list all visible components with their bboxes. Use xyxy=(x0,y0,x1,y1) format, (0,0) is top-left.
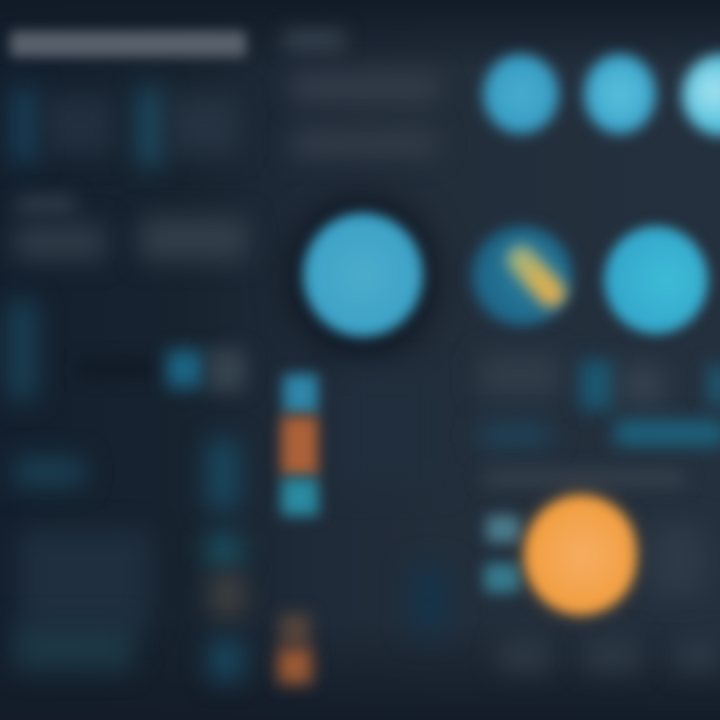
icon: top circle 3 xyxy=(682,54,720,136)
heading xyxy=(284,30,344,52)
chip bottom xyxy=(484,563,520,593)
small teal mark xyxy=(480,425,550,445)
grey text xyxy=(620,365,665,405)
left accent bar xyxy=(8,300,36,400)
segment blue xyxy=(283,374,319,414)
column blue mid xyxy=(208,535,240,565)
chart: stacked bar xyxy=(270,364,328,525)
icon: top circle 2 xyxy=(584,54,656,134)
panel: lower right card xyxy=(476,469,716,674)
heading left xyxy=(16,196,76,212)
stat text right xyxy=(170,95,240,155)
text line xyxy=(292,75,437,101)
panel: right mini stats xyxy=(476,352,720,456)
chart: donut with yellow wedge xyxy=(464,218,580,334)
column blue bottom xyxy=(210,640,242,680)
column tan xyxy=(212,575,242,615)
footer right xyxy=(675,640,720,670)
stat column left xyxy=(14,88,36,163)
teal bar xyxy=(615,420,720,446)
panel: middle left text xyxy=(0,191,252,407)
title xyxy=(10,31,246,57)
text block left xyxy=(14,224,106,260)
teal chip xyxy=(166,350,204,388)
donut body xyxy=(472,226,572,326)
panel: lower left list xyxy=(7,339,253,691)
list heading xyxy=(14,458,84,486)
panel: top left summary xyxy=(2,24,252,176)
text line 2 xyxy=(292,130,437,156)
column blue top xyxy=(208,440,238,510)
chart: lower stacked bar xyxy=(266,606,324,696)
chart: large blue pie xyxy=(303,213,423,337)
text block right xyxy=(140,218,248,260)
panel: top middle text xyxy=(281,24,433,158)
list rows xyxy=(20,530,150,630)
yellow wedge xyxy=(502,240,570,312)
segment teal xyxy=(281,478,319,516)
shadow behind large pie xyxy=(285,195,440,360)
right chip xyxy=(708,365,720,405)
panel: lower middle dark column xyxy=(410,565,450,635)
stat column middle xyxy=(138,88,162,166)
card heading xyxy=(484,471,684,485)
teal chip xyxy=(580,360,614,410)
bottom list row xyxy=(14,625,134,670)
stat text left xyxy=(45,95,115,155)
dark label xyxy=(80,362,155,376)
chip top xyxy=(486,515,520,543)
panel: middle text column xyxy=(335,370,445,490)
text block xyxy=(480,355,560,395)
segment orange xyxy=(278,648,312,684)
text right xyxy=(650,525,705,595)
chart: right blue pie xyxy=(604,226,708,334)
footer left xyxy=(500,640,550,670)
footer middle xyxy=(585,640,640,670)
chart: orange circle xyxy=(524,495,638,615)
grey chip xyxy=(208,348,246,392)
segment orange xyxy=(281,416,319,476)
segment tan xyxy=(280,614,310,646)
icon: top circle 1 xyxy=(483,54,559,134)
